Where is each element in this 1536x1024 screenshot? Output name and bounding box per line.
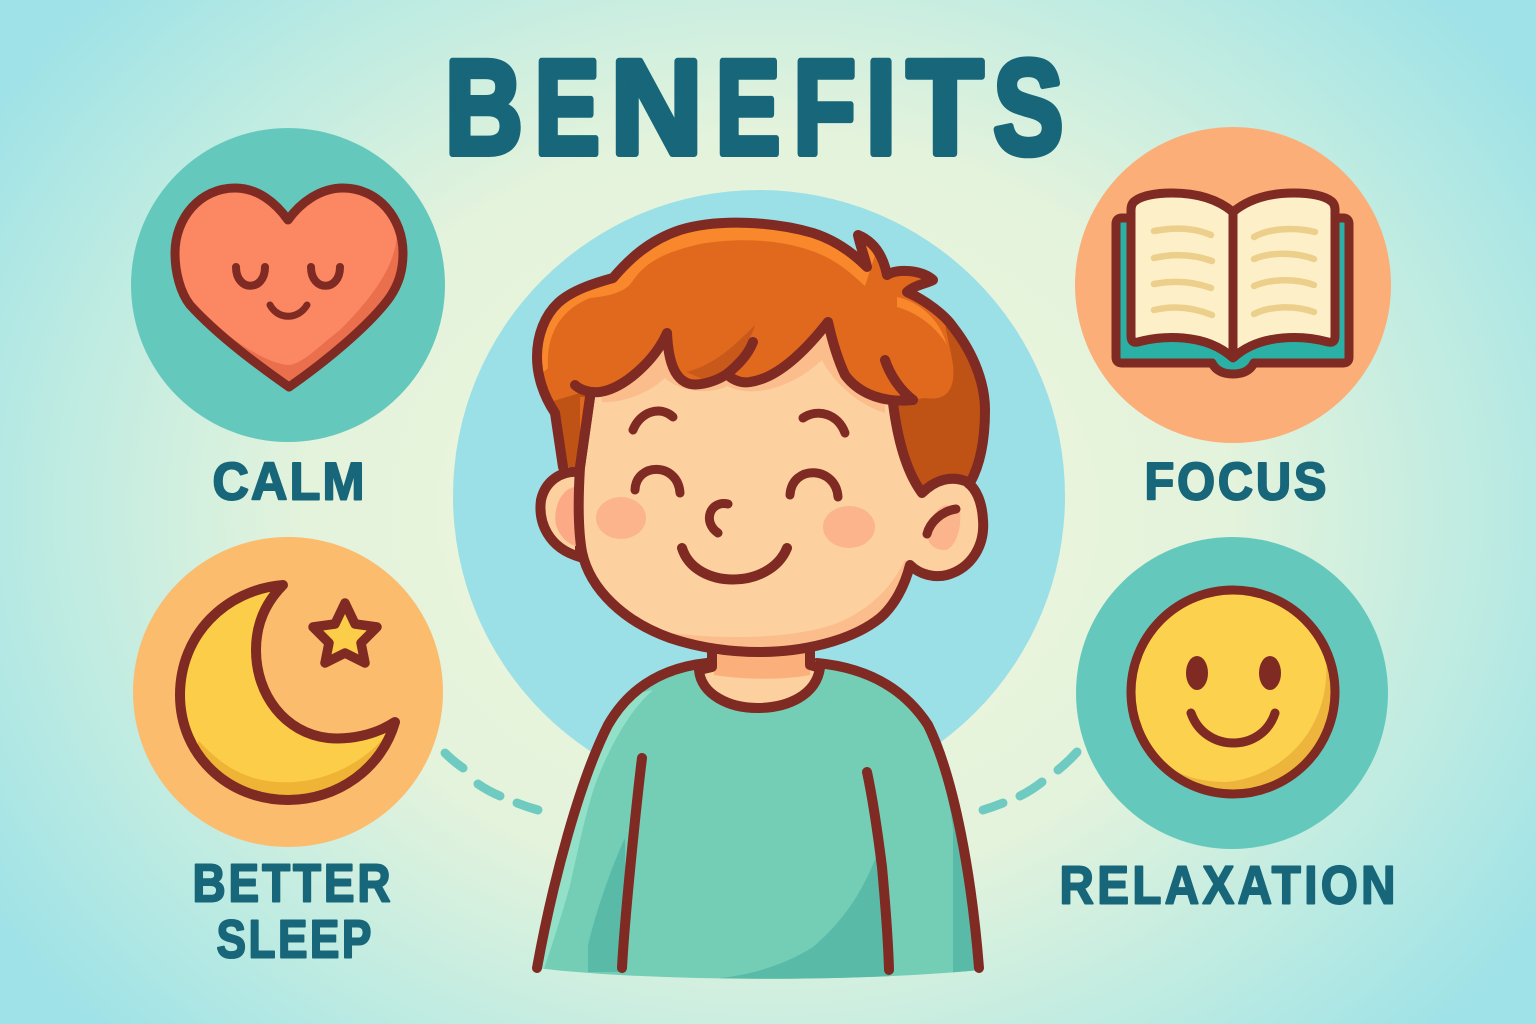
panel: focus <box>1075 127 1391 511</box>
panel: relaxation <box>1060 537 1396 915</box>
icon: open book <box>1116 193 1349 374</box>
title: T <box>907 34 983 182</box>
label: relaxation: RELAXATION <box>1060 855 1396 915</box>
dashed connector: right <box>983 752 1077 810</box>
title: E <box>716 34 780 182</box>
smiling eyes and brows <box>633 411 845 497</box>
character: smiling boy <box>525 215 1000 990</box>
panel: better sleep <box>133 537 443 970</box>
face <box>579 300 983 665</box>
title: B <box>445 34 523 182</box>
label: better sleep: SLEEP <box>216 909 371 970</box>
focus circle <box>1075 127 1391 443</box>
label: better sleep: BETTER <box>193 853 391 913</box>
mouth <box>682 548 787 580</box>
dashed connector: left <box>445 753 538 810</box>
left ear <box>540 472 580 557</box>
icon: smiling heart <box>175 188 410 392</box>
shirt <box>525 663 990 990</box>
central backdrop circle <box>453 190 1065 802</box>
title: S <box>993 34 1063 182</box>
panel: calm <box>131 128 445 511</box>
hair <box>530 215 1000 495</box>
title: N <box>611 34 703 182</box>
title: E <box>535 34 600 182</box>
better sleep circle <box>133 537 443 847</box>
icon: smiley face <box>1131 590 1345 810</box>
neck and collar <box>697 650 820 708</box>
title: F <box>793 34 856 182</box>
nose <box>709 504 728 533</box>
icon: moon and star <box>180 585 400 815</box>
relaxation circle <box>1076 537 1388 849</box>
label: better sleep <box>193 853 391 970</box>
title: I <box>866 34 896 182</box>
calm circle <box>131 128 445 442</box>
label: calm: CALM <box>213 451 365 511</box>
label: focus: FOCUS <box>1144 452 1326 511</box>
